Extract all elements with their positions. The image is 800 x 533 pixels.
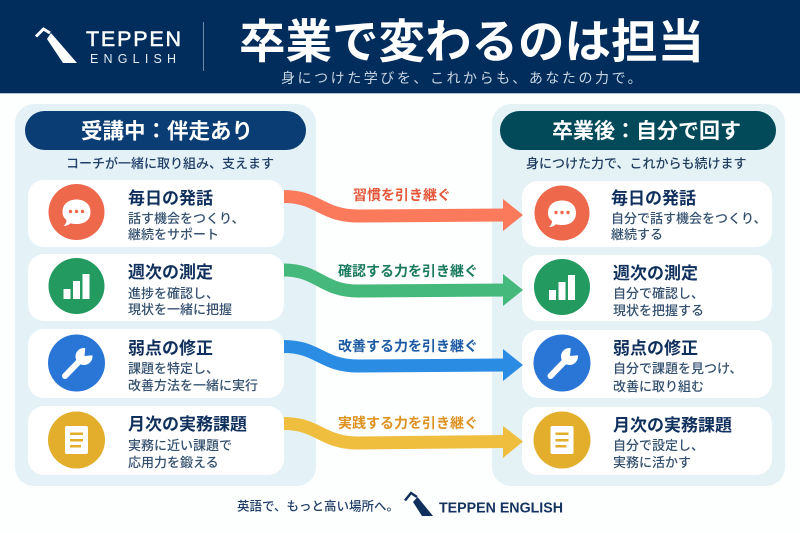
header logo: TEPPEN	[86, 27, 183, 51]
card: weekly measurement: 現状を把握する	[613, 303, 704, 318]
card: daily speaking: 毎日の発話	[128, 189, 213, 208]
heading pill: during course: 受講中：伴走あり	[81, 120, 253, 144]
title: 卒業で変わるのは担当	[239, 16, 704, 68]
card: daily speaking: 話す機会をつくり、	[128, 211, 244, 226]
card: weekly measurement: 自分で確認し、	[613, 286, 704, 301]
card: monthly assignment	[28, 406, 284, 475]
label: habit: 習慣を引き継ぐ	[353, 187, 451, 203]
heading pill: after graduation	[500, 111, 776, 150]
card: daily speaking: 継続する	[611, 227, 663, 242]
card: fixing weak points: 弱点の修正	[128, 339, 213, 358]
icon: wrench	[534, 334, 590, 392]
label: improve: 改善する力を引き継ぐ	[338, 338, 478, 354]
panel caption: 身につけた力で、これからも続けます	[526, 156, 746, 171]
card: monthly assignment: 実務に近い課題で	[128, 438, 232, 453]
card: daily speaking: 毎日の発話	[611, 189, 696, 208]
card: weekly measurement: 進捗を確認し、	[128, 286, 219, 301]
header logo: ENGLISH	[90, 52, 181, 66]
card: weekly measurement	[28, 254, 284, 321]
heading pill: during course	[25, 111, 306, 150]
card: monthly assignment	[522, 407, 772, 475]
arrow: improve	[284, 346, 523, 381]
heading pill: after graduation: 卒業後：自分で回す	[552, 120, 741, 143]
card: fixing weak points	[28, 329, 284, 398]
arrow: confirm	[284, 270, 523, 306]
footer tagline: 英語で、もっと高い場所へ。	[237, 498, 399, 514]
icon: speech bubble	[534, 186, 590, 240]
card: daily speaking: 継続をサポート	[128, 227, 219, 242]
card: weekly measurement: 現状を一緒に把握	[128, 302, 232, 317]
icon: document	[534, 412, 590, 468]
icon: wrench	[48, 334, 105, 392]
icon: speech bubble	[48, 184, 104, 240]
card: daily speaking	[522, 181, 772, 247]
card: monthly assignment: 実務に活かす	[613, 455, 691, 470]
card: monthly assignment: 応用力を鍛える	[128, 455, 219, 470]
card: weekly measurement: 週次の測定	[613, 264, 698, 283]
label: confirm: 確認する力を引き継ぐ	[338, 263, 478, 279]
card: weekly measurement	[522, 255, 772, 321]
panel: after graduation	[492, 104, 785, 486]
card: fixing weak points: 改善に取り組む	[613, 379, 704, 394]
icon: bar chart	[48, 258, 104, 314]
arrow: habit	[284, 196, 523, 231]
panel caption: コーチが一緒に取り組み、支えます	[66, 156, 274, 171]
card: fixing weak points	[522, 330, 772, 398]
card: weekly measurement: 週次の測定	[128, 263, 213, 282]
card: daily speaking	[28, 180, 284, 247]
card: monthly assignment: 自分で設定し、	[613, 438, 704, 453]
icon: document	[48, 412, 105, 468]
header logo	[36, 27, 183, 66]
card: monthly assignment: 月次の実務課題	[128, 415, 247, 434]
card: daily speaking: 自分で話す機会をつくり、	[611, 211, 766, 226]
footer logo	[405, 493, 563, 516]
card: fixing weak points: 自分で課題を見つけ、	[613, 361, 742, 376]
icon: bar chart	[534, 259, 590, 315]
header band	[0, 0, 800, 94]
card: fixing weak points: 課題を特定し、	[128, 361, 219, 376]
card: fixing weak points: 弱点の修正	[613, 339, 698, 358]
panel: during course	[15, 104, 316, 486]
card: monthly assignment: 月次の実務課題	[613, 416, 732, 435]
subtitle: 身につけた学びを、これからも、あなたの力で。	[281, 70, 644, 86]
card: fixing weak points: 改善方法を一緒に実行	[128, 378, 258, 393]
footer logo: TEPPEN ENGLISH	[439, 500, 563, 516]
arrow: practice	[284, 424, 523, 458]
label: practice: 実践する力を引き継ぐ	[338, 415, 478, 431]
